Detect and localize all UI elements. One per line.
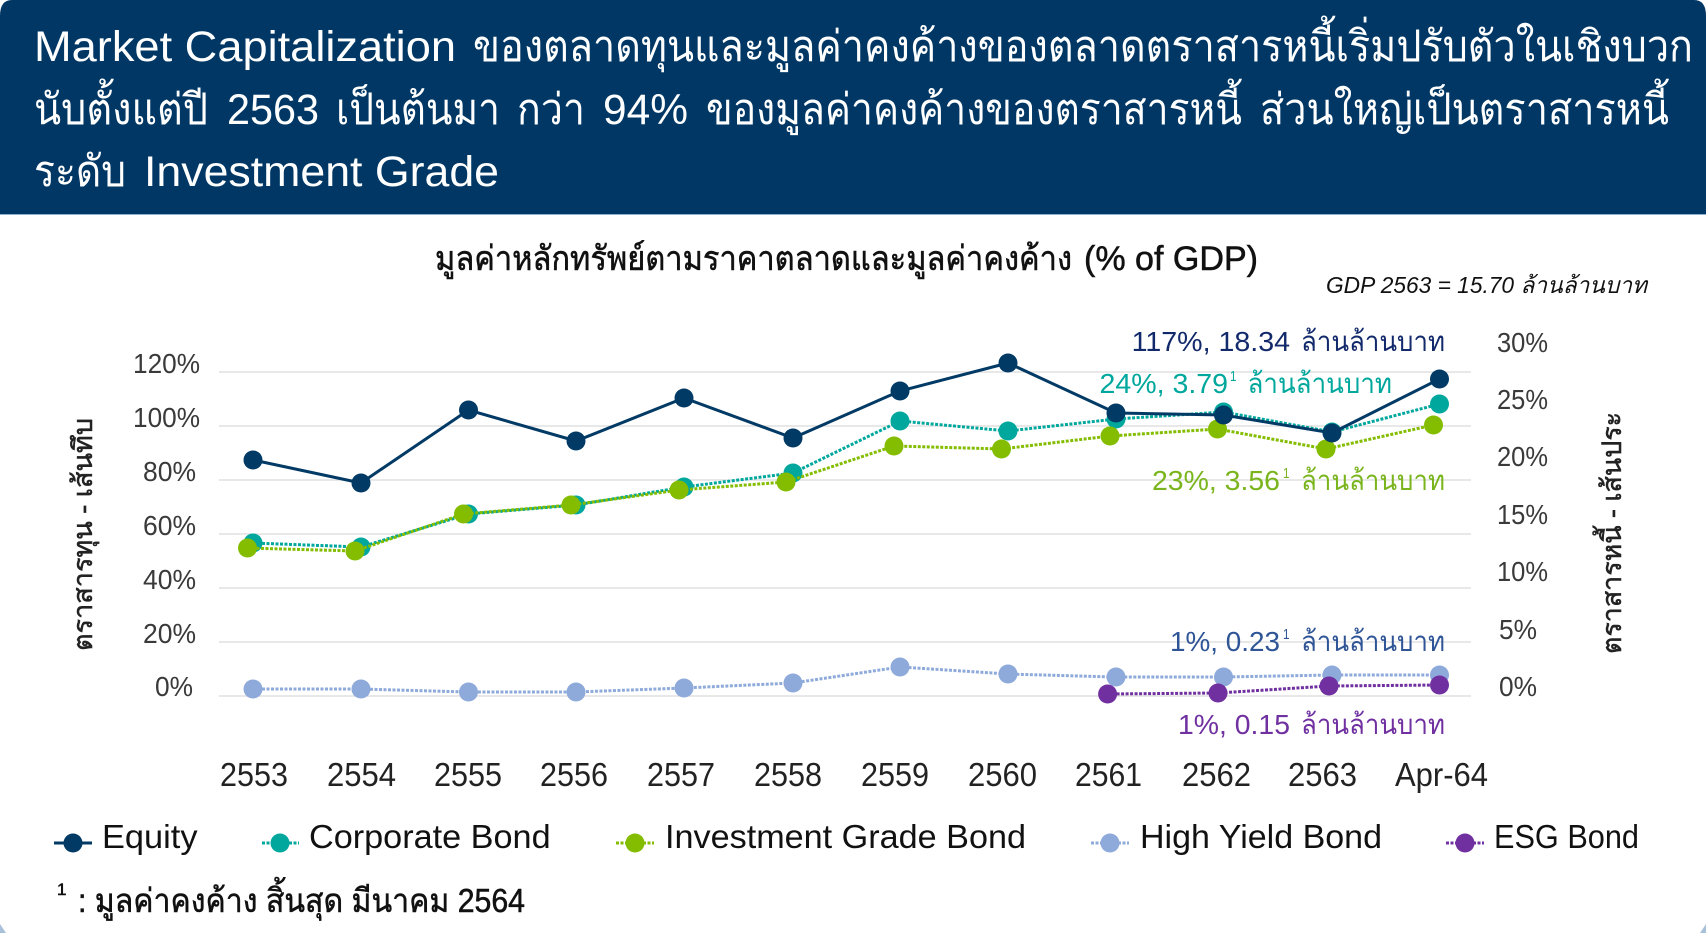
x axis labels: 2562 <box>1182 756 1251 793</box>
x axis labels: 2558 <box>754 756 822 793</box>
callout: ESG value: 1%, 0.15 <box>1178 709 1290 740</box>
chart title: (% of GDP) <box>1084 240 1258 278</box>
header banner: Investment Grade <box>144 148 499 196</box>
GDP note: GDP 2563 = 15.70 ล้านล้านบาท <box>1326 272 1649 298</box>
callout: investment grade value: ล้านล้านบาท <box>1301 465 1445 496</box>
right axis labels: 5% <box>1499 614 1537 645</box>
callout: ESG value <box>1178 709 1445 740</box>
header banner: 94% <box>603 86 688 134</box>
x axis labels: 2556 <box>540 756 608 793</box>
left axis labels: 60% <box>143 510 196 541</box>
callout: ESG value: ล้านล้านบาท <box>1301 709 1445 740</box>
left axis labels <box>133 348 200 702</box>
header banner: ของมูลค่าคงค้างของตราสารหนี้ <box>706 78 1242 136</box>
series: high yield bond <box>244 658 1449 702</box>
x axis labels: 2559 <box>861 756 929 793</box>
legend item: high yield bond: High Yield Bond <box>1140 818 1382 855</box>
left axis labels: 100% <box>133 402 200 433</box>
callout: high yield value: 1 <box>1283 626 1290 643</box>
right axis labels: 25% <box>1497 384 1548 415</box>
x axis labels: Apr-64 <box>1395 756 1488 793</box>
callout: high yield value <box>1170 626 1445 657</box>
x axis labels: 2561 <box>1075 756 1142 793</box>
grid lines <box>219 372 1471 696</box>
right axis title: ตราสารหนี้ - เส้นประ <box>1592 412 1627 654</box>
left axis labels: 20% <box>143 618 196 649</box>
header banner: Market Capitalization <box>34 23 456 71</box>
callout: corporate bond value: ล้านล้านบาท <box>1248 368 1392 399</box>
legend <box>54 818 1639 855</box>
chart title: มูลค่าหลักทรัพย์ตามราคาตลาดและมูลค่าคงค้าง <box>435 240 1072 279</box>
series: investment grade bond <box>238 416 1443 560</box>
header banner: กว่า <box>517 86 585 134</box>
callout: equity value <box>1132 326 1445 357</box>
callout: equity value: 117%, 18.34 <box>1132 326 1290 357</box>
x axis labels <box>220 756 1488 793</box>
header banner: 2563 <box>227 86 319 134</box>
footnote: 1 <box>57 880 66 899</box>
legend item: ESG bond: ESG Bond <box>1494 818 1639 855</box>
right axis labels: 30% <box>1497 327 1548 358</box>
left axis title: ตราสารทุน - เส้นทึบ <box>68 418 100 651</box>
right axis labels <box>1497 327 1548 702</box>
header banner: เป็นต้นมา <box>336 84 500 134</box>
x axis labels: 2554 <box>327 756 396 793</box>
legend item: investment grade bond: Investment Grade Bond <box>665 818 1026 855</box>
header banner: ส่วนใหญ่เป็นตราสารหนี้ <box>1260 78 1669 134</box>
header banner: นับตั้งแต่ปี <box>34 78 208 134</box>
series: equity <box>244 354 1449 492</box>
header banner <box>0 0 1706 214</box>
x axis labels: 2555 <box>434 756 502 793</box>
callout: corporate bond value: 1 <box>1230 368 1236 385</box>
callout: high yield value: 1%, 0.23 <box>1170 626 1280 657</box>
right axis labels: 15% <box>1497 499 1548 530</box>
x axis labels: 2557 <box>647 756 715 793</box>
callout: equity value: ล้านล้านบาท <box>1301 326 1445 357</box>
right axis labels: 0% <box>1499 671 1537 702</box>
callout: high yield value: ล้านล้านบาท <box>1301 626 1445 657</box>
callout: corporate bond value: 24%, 3.79 <box>1100 368 1228 399</box>
left axis labels: 80% <box>143 456 196 487</box>
series: corporate bond <box>244 394 1449 556</box>
x axis labels: 2553 <box>220 756 288 793</box>
header banner: ระดับ <box>34 148 126 196</box>
legend item: equity <box>54 818 198 855</box>
right axis labels: 10% <box>1497 556 1548 587</box>
x axis labels: 2563 <box>1288 756 1357 793</box>
right axis labels: 20% <box>1497 441 1548 472</box>
legend item: equity: Equity <box>102 818 198 855</box>
legend item: corporate bond: Corporate Bond <box>309 818 551 855</box>
left axis labels: 0% <box>155 671 193 702</box>
left axis labels: 40% <box>143 564 196 595</box>
callout: investment grade value <box>1152 465 1445 496</box>
footnote: : มูลค่าคงค้าง สิ้นสุด มีนาคม 2564 <box>78 877 525 921</box>
left axis labels: 120% <box>133 348 200 379</box>
callout: investment grade value: 23%, 3.56 <box>1152 465 1280 496</box>
callout: investment grade value: 1 <box>1283 465 1290 482</box>
callout: corporate bond value <box>1100 368 1392 399</box>
x axis labels: 2560 <box>968 756 1037 793</box>
series: ESG bond <box>1098 676 1449 704</box>
